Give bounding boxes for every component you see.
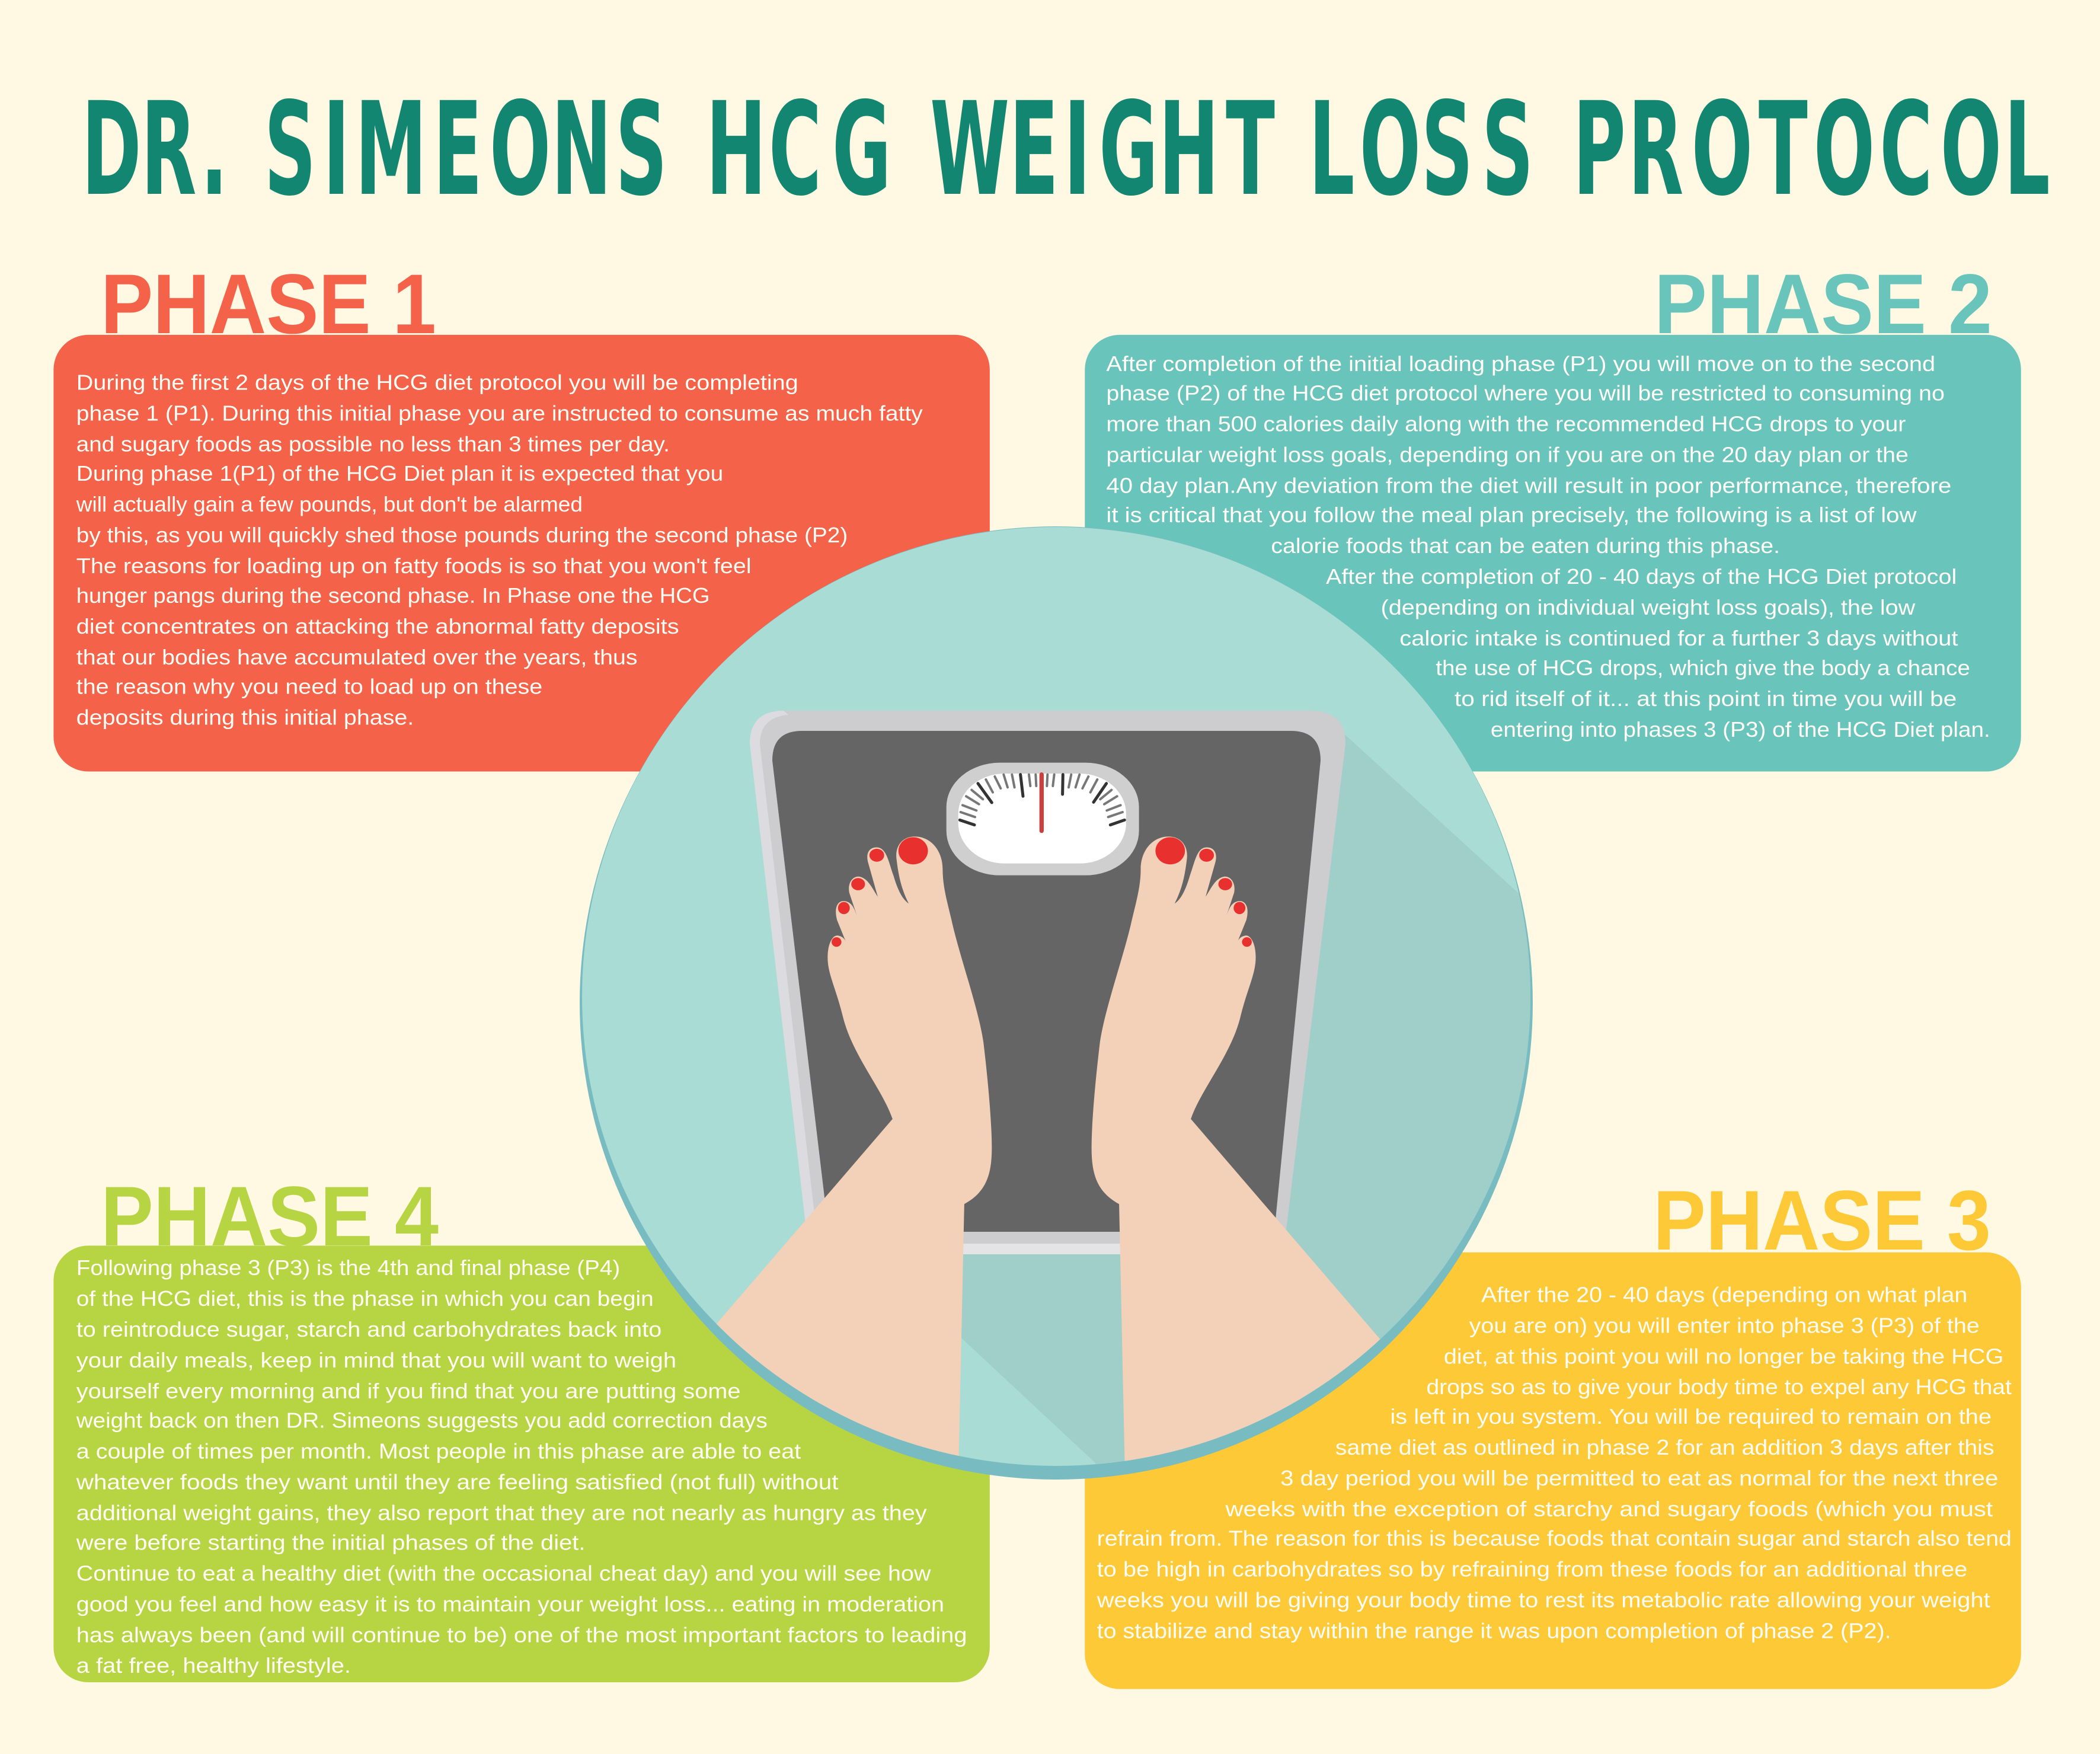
panel: phase 1: by this, as you will quickly shed those pounds during the second phase (P2) [76, 523, 848, 547]
panel: phase 2: it is critical that you follow the meal plan precisely, the following is a list of low [1106, 503, 1917, 527]
panel: phase 1: During phase 1(P1) of the HCG Diet plan it is expected that you [76, 461, 723, 485]
scale dial [947, 763, 1139, 876]
panel: phase 1: diet concentrates on attacking the abnormal fatty deposits [76, 614, 679, 638]
panel: phase 1: deposits during this initial phase. [76, 705, 414, 729]
bathroom scale body [750, 711, 1345, 1254]
panel: phase 3: is left in you system. You will be required to remain on the [1390, 1404, 1992, 1429]
panel: phase 2: 40 day plan.Any deviation from the diet will result in poor performance, therefore [1106, 474, 1951, 498]
panel: phase 1 [53, 335, 990, 772]
panel: phase 2: entering into phases 3 (P3) of the HCG Diet plan. [1491, 717, 1990, 742]
right foot and leg [1092, 836, 1380, 1461]
heading: phase 2: PHASE 2 [1654, 257, 1992, 352]
panel: phase 1: phase 1 (P1). During this initial phase you are instructed to consume as much fatty [76, 401, 923, 426]
panel: phase 4: has always been (and will continue to be) one of the most important factors to leading [76, 1622, 967, 1647]
title: DR. SIMEONS HCG WEIGHT LOSS PROTOCOL [82, 75, 2050, 225]
panel: phase 3 [1085, 1253, 2021, 1689]
heading: phase 3: PHASE 3 [1653, 1174, 1991, 1268]
panel: phase 2: particular weight loss goals, depending on if you are on the 20 day plan or the [1106, 443, 1909, 467]
panel: phase 1: The reasons for loading up on fatty foods is so that you won't feel [76, 554, 752, 578]
panel: phase 4: of the HCG diet, this is the phase in which you can begin [76, 1286, 654, 1311]
panel: phase 3: diet, at this point you will no longer be taking the HCG [1444, 1344, 2003, 1368]
heading: phase 1: PHASE 1 [101, 257, 436, 352]
panel: phase 2: calorie foods that can be eaten during this phase. [1271, 533, 1780, 558]
panel: phase 4: were before starting the initial phases of the diet. [76, 1530, 585, 1554]
panel: phase 1: that our bodies have accumulated over the years, thus [76, 645, 638, 669]
panel: phase 1: and sugary foods as possible no less than 3 times per day. [76, 432, 670, 456]
circle background [582, 527, 1530, 1466]
circle rim [580, 526, 1533, 1480]
panel: phase 3: weeks you will be giving your body time to rest its metabolic rate allowing your weight [1097, 1588, 1990, 1612]
panel: phase 4: Following phase 3 (P3) is the 4th and final phase (P4) [76, 1255, 620, 1280]
panel: phase 2 [1085, 335, 2021, 772]
panel: phase 4: good you feel and how easy it is to maintain your weight loss... eating in moderation [76, 1592, 944, 1616]
illustration: person on bathroom scale in circle [580, 526, 1553, 1541]
panel: phase 2: the use of HCG drops, which give the body a chance [1436, 656, 1970, 680]
panel: phase 4: weight back on then DR. Simeons suggests you add correction days [76, 1408, 768, 1433]
heading: phase 4: PHASE 4 [101, 1170, 439, 1264]
panel: phase 4: whatever foods they want until they are feeling satisfied (not full) without [76, 1470, 839, 1494]
panel: phase 2: After the completion of 20 - 40 days of the HCG Diet protocol [1326, 564, 1957, 589]
panel: phase 1: the reason why you need to load up on these [76, 674, 542, 698]
panel: phase 4: yourself every morning and if you find that you are putting some [76, 1379, 741, 1403]
panel: phase 4: a fat free, healthy lifestyle. [76, 1653, 351, 1678]
panel: phase 3: refrain from. The reason for this is because foods that contain sugar and starch also tend [1097, 1526, 2012, 1551]
left foot and leg [716, 836, 992, 1456]
panel: phase 2: to rid itself of it... at this point in time you will be [1455, 686, 1957, 711]
panel: phase 3: to be high in carbohydrates so by refraining from these foods for an additional three [1097, 1557, 1967, 1582]
panel: phase 1: During the first 2 days of the HCG diet protocol you will be completing [76, 370, 798, 395]
panel: phase 4: a couple of times per month. Most people in this phase are able to eat [76, 1439, 801, 1464]
panel: phase 2: phase (P2) of the HCG diet protocol where you will be restricted to consuming no [1106, 381, 1945, 405]
panel: phase 4: additional weight gains, they also report that they are not nearly as hungry as they [76, 1501, 927, 1525]
panel: phase 2: After completion of the initial loading phase (P1) you will move on to the second [1106, 352, 1935, 376]
panel: phase 1: will actually gain a few pounds, but don't be alarmed [76, 492, 583, 516]
panel: phase 3: After the 20 - 40 days (depending on what plan [1481, 1282, 1967, 1306]
panel: phase 2: caloric intake is continued for a further 3 days without [1399, 626, 1958, 650]
panel: phase 1: hunger pangs during the second phase. In Phase one the HCG [76, 583, 710, 608]
panel: phase 2: (depending on individual weight loss goals), the low [1381, 595, 1916, 619]
panel: phase 4: your daily meals, keep in mind that you will want to weigh [76, 1348, 676, 1372]
panel: phase 2: more than 500 calories daily along with the recommended HCG drops to your [1106, 412, 1906, 436]
panel: phase 3: drops so as to give your body time to expel any HCG that [1426, 1375, 2012, 1399]
panel: phase 4: to reintroduce sugar, starch and carbohydrates back into [76, 1317, 661, 1341]
scale drop shadow [961, 735, 1530, 1464]
panel: phase 3: same diet as outlined in phase 2 for an addition 3 days after this [1335, 1435, 1994, 1459]
panel: phase 3: you are on) you will enter into phase 3 (P3) of the [1469, 1313, 1980, 1337]
panel: phase 4 [53, 1245, 990, 1682]
panel: phase 3: to stabilize and stay within the range it was upon completion of phase 2 (P2). [1097, 1618, 1891, 1643]
panel: phase 3: weeks with the exception of starchy and sugary foods (which you must [1225, 1497, 1993, 1521]
panel: phase 4: Continue to eat a healthy diet (with the occasional cheat day) and you will see how [76, 1561, 931, 1585]
panel: phase 3: 3 day period you will be permitted to eat as normal for the next three [1280, 1466, 1998, 1490]
